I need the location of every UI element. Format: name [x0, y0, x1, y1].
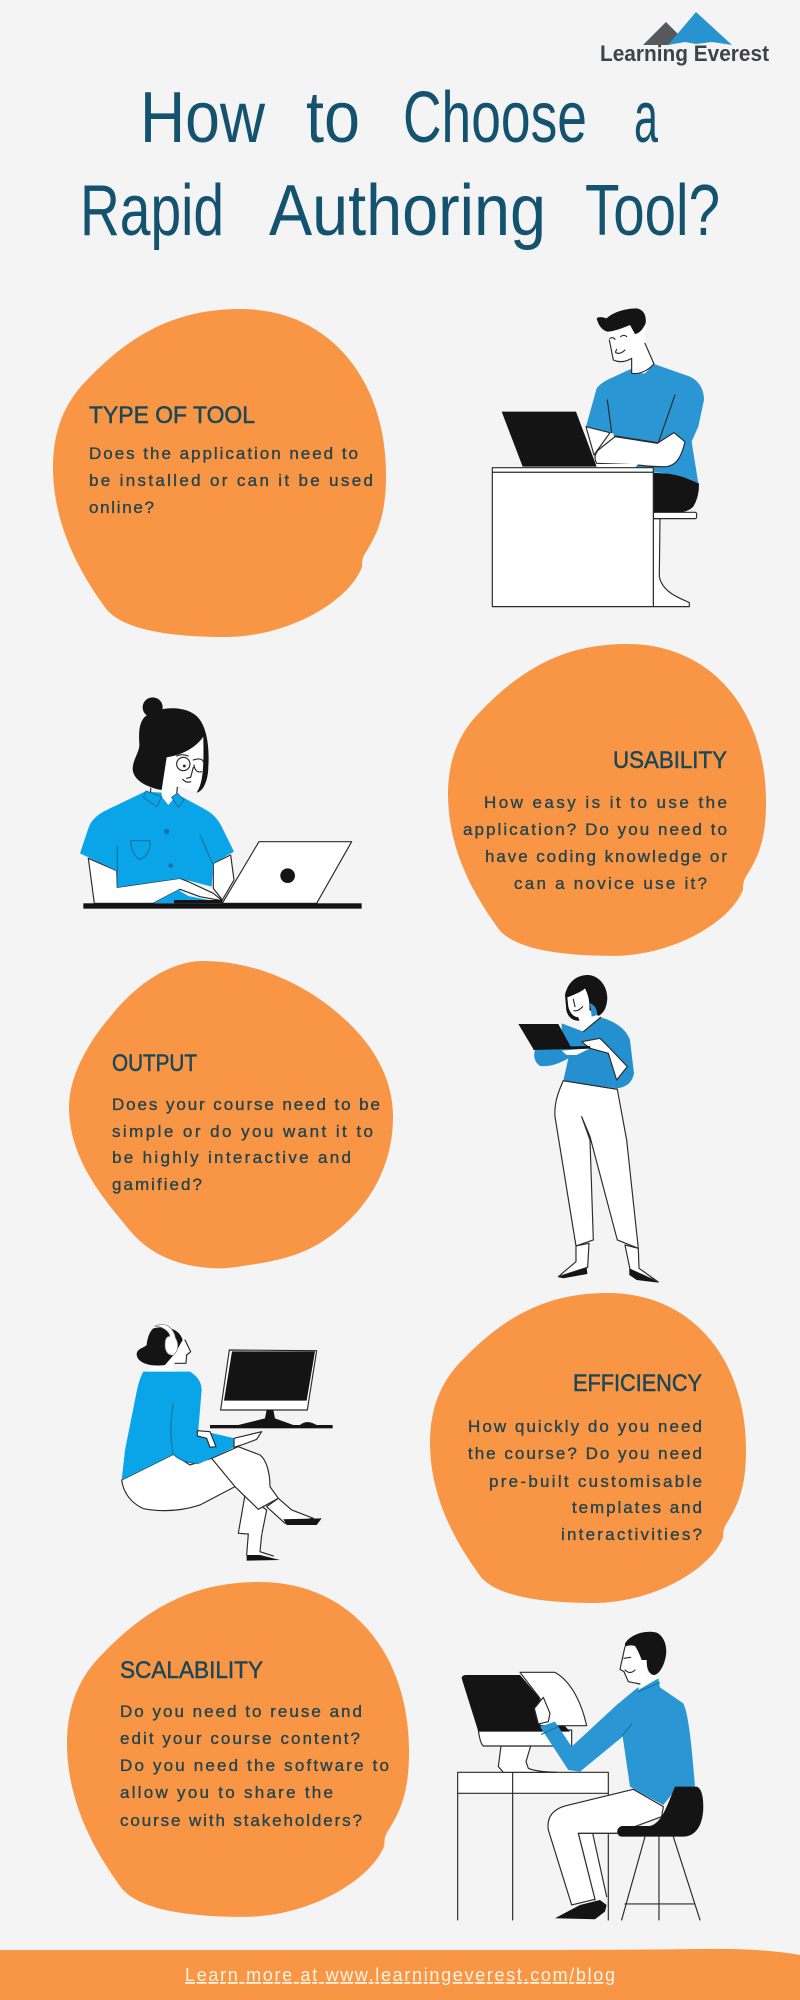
body text: allow you to share the: [120, 1783, 333, 1802]
body text: Does your course need to be: [112, 1095, 380, 1114]
orange blob: [67, 1582, 409, 1917]
panel: output: [69, 961, 393, 1268]
title: How: [140, 78, 266, 158]
illustration: woman with glasses at laptop: [80, 697, 362, 909]
body text: Do you need to reuse and: [120, 1702, 362, 1721]
body text: online?: [89, 498, 154, 517]
orange strip: [0, 1949, 800, 2000]
title: [80, 78, 720, 251]
orange blob: [53, 309, 386, 637]
orange blob: [448, 644, 766, 956]
body text: How quickly do you need: [468, 1417, 702, 1436]
heading: OUTPUT: [112, 1050, 197, 1077]
body text: pre-built customisable: [489, 1472, 702, 1491]
body text: simple or do you want it to: [112, 1122, 373, 1141]
body text: be highly interactive and: [112, 1148, 351, 1167]
body text: [112, 1095, 380, 1194]
body text: [463, 793, 727, 893]
title: Tool?: [585, 171, 720, 251]
body text: the course? Do you need: [468, 1444, 702, 1463]
orange blob: [69, 961, 393, 1268]
orange blob: [430, 1293, 746, 1603]
panel: usability: [448, 644, 766, 956]
body text: [89, 444, 373, 517]
body text: have coding knowledge or: [485, 847, 727, 866]
body text: application? Do you need to: [463, 820, 727, 839]
body text: be installed or can it be used: [89, 471, 373, 490]
body text: templates and: [572, 1498, 702, 1517]
title: to: [306, 78, 360, 158]
body text: [120, 1702, 389, 1830]
heading: USABILITY: [613, 747, 727, 774]
footer link text: Learn more at www.learningeverest.com/blog: [185, 1965, 615, 1985]
panel: efficiency: [430, 1293, 746, 1603]
panel: scalability: [67, 1582, 409, 1917]
body text: gamified?: [112, 1175, 202, 1194]
title: Choose: [403, 78, 587, 158]
body text: interactivities?: [561, 1525, 702, 1544]
heading: TYPE OF TOOL: [89, 402, 255, 429]
panel: type of tool: [53, 309, 386, 637]
logo: Learning Everest: [600, 12, 770, 66]
body text: Does the application need to: [89, 444, 358, 463]
logo wordmark: Learning Everest: [600, 41, 770, 66]
title: Rapid: [80, 171, 224, 251]
title: Authoring: [269, 171, 546, 251]
body text: [468, 1417, 702, 1544]
body text: can a novice use it?: [514, 874, 707, 893]
illustration: seated woman with headset at monitor: [122, 1324, 333, 1561]
body text: edit your course content?: [120, 1729, 360, 1748]
illustration: man typing at a desk: [492, 308, 704, 607]
footer band: [0, 1949, 800, 2000]
illustration: standing woman holding a laptop: [518, 975, 658, 1283]
body text: How easy is it to use the: [484, 793, 727, 812]
body text: Do you need the software to: [120, 1756, 389, 1775]
icon: mountains: [643, 12, 732, 45]
title: a: [634, 78, 659, 158]
body text: course with stakeholders?: [120, 1811, 362, 1830]
heading: SCALABILITY: [120, 1657, 263, 1684]
illustration: man with paper at desktop computer: [458, 1632, 703, 1920]
heading: EFFICIENCY: [573, 1370, 702, 1397]
